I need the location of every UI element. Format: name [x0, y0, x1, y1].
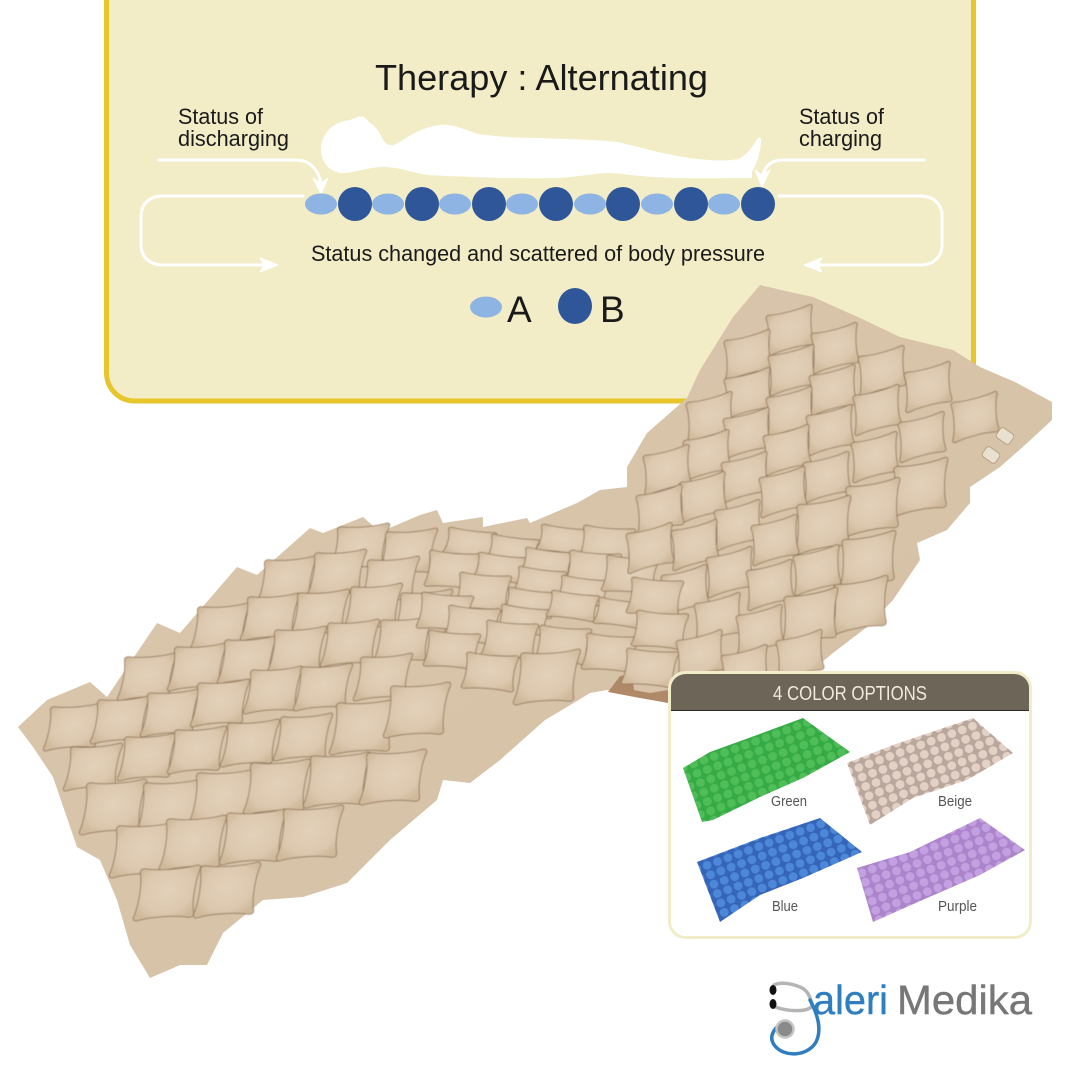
wordmark: aleri: [813, 977, 888, 1023]
legend: B: [600, 289, 625, 330]
swatch: beige mattress: Beige: [938, 793, 972, 810]
swatch: green mattress: [683, 718, 850, 822]
arrow: left loop: [141, 196, 303, 272]
swatch: blue mattress: [697, 818, 862, 922]
legend: A: [507, 289, 532, 330]
legend: [470, 288, 625, 330]
air cells: left section: [43, 523, 453, 921]
arrow: discharging: [159, 160, 328, 194]
air cells: right section: [621, 304, 999, 696]
air cells: middle section: [416, 524, 659, 705]
label: status of discharging: Status of: [178, 104, 264, 129]
label: status of discharging: discharging: [178, 126, 289, 151]
icon: air connectors: [981, 426, 1015, 465]
swatch: beige mattress: [847, 718, 1013, 825]
title: Therapy : Alternating: [375, 57, 708, 98]
header bar: [671, 674, 1029, 710]
arrow: right loop: [779, 196, 942, 272]
arrow: charging: [755, 160, 924, 187]
caption: body pressure: Status changed and scattered of body pressure: [311, 241, 765, 266]
product: inflatable alternating mattress: [18, 285, 1052, 978]
icon: stethoscope: [770, 983, 819, 1054]
icon: lying body silhouette: [321, 116, 761, 178]
swatch: blue mattress: Blue: [772, 898, 798, 915]
swatch: green mattress: Green: [771, 793, 807, 810]
swatch: purple mattress: Purple: [938, 898, 977, 915]
heading: 4 COLOR OPTIONS: [773, 683, 927, 705]
label: status of charging: charging: [799, 126, 882, 151]
logo: Galeri Medika: [770, 977, 1032, 1054]
air cell row: [305, 187, 775, 221]
label: status of charging: Status of: [799, 104, 885, 129]
panel: 4 color options: [670, 672, 1030, 938]
wordmark: Medika: [897, 977, 1032, 1023]
panel: therapy alternating diagram: [106, 0, 974, 401]
swatch: purple mattress: [857, 818, 1025, 922]
